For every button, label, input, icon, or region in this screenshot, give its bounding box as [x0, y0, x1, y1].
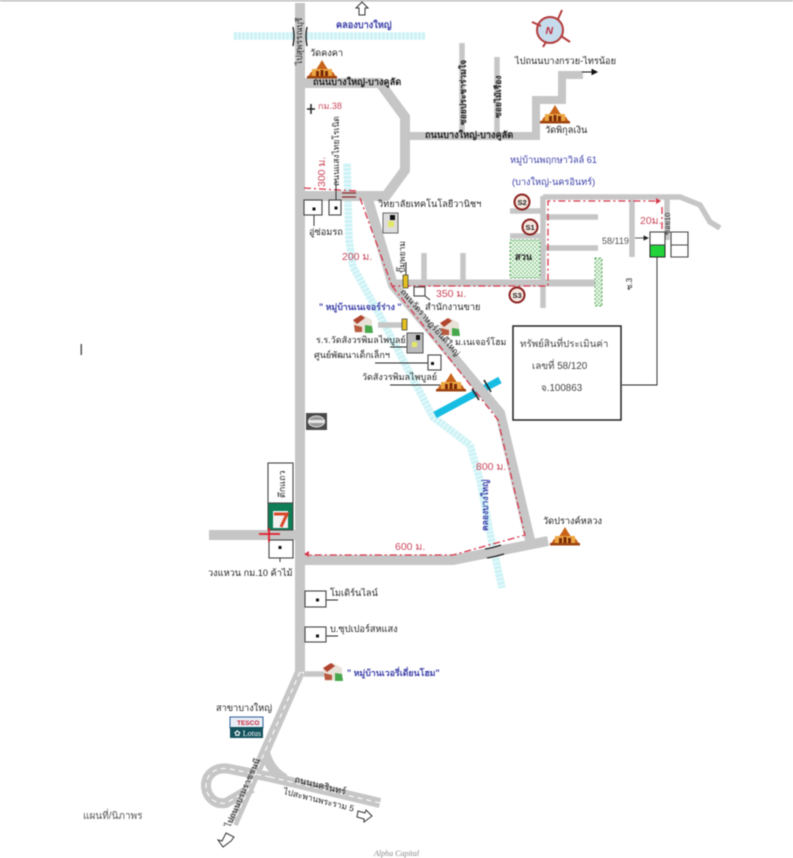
child centre label: ศูนย์พัฒนาเด็กเล็กฯ	[314, 348, 390, 361]
sales office	[414, 287, 425, 296]
khlong label: คลองบางใหญ่	[336, 19, 392, 31]
callout text 1: ทรัพย์สินที่ประเมินค่า	[520, 337, 608, 350]
college flag	[390, 215, 395, 220]
arrow to highway	[218, 833, 234, 847]
nissan emblem	[308, 416, 324, 427]
canal: blue cross channel	[435, 380, 500, 415]
800 m label: 800 ม.	[476, 461, 506, 473]
destination label: ไปถนนบางกรวย-ไทรน้อย	[514, 56, 616, 66]
temple: wat prang luang	[550, 527, 580, 546]
wat label: วัดสังวรพิมลไพบูลย์	[362, 371, 437, 383]
logo bottom	[230, 727, 263, 738]
nissan bar	[308, 420, 325, 423]
buildings	[268, 200, 688, 642]
300 m label: 300 ม.	[316, 157, 328, 187]
north arrow top	[356, 2, 368, 15]
branch at nature village	[378, 322, 403, 328]
watermark: Alpha Capital	[373, 849, 420, 858]
lane markings	[206, 672, 380, 824]
park label: สวน	[515, 252, 533, 262]
house icons	[323, 315, 460, 681]
58/119 label: 58/119	[602, 236, 629, 246]
road to suphan label: ไปสุพรรณบุรี	[294, 17, 305, 66]
park	[510, 240, 540, 278]
plot 58/119	[650, 232, 665, 245]
college plant	[388, 221, 394, 227]
callout box	[513, 326, 621, 420]
compass	[532, 10, 570, 47]
wat prang luang label: วัดปรางค์หลวง	[543, 515, 602, 526]
nature village label: " หมู่บ้านเนเจอร์ร่าง "	[319, 301, 402, 313]
callout text 2: เลขที่ 58/120	[532, 359, 588, 372]
bridge marks at top	[293, 27, 307, 46]
s1 text: S1	[526, 223, 535, 232]
bang yai - bang kulat road	[405, 75, 583, 136]
s3 marker	[510, 288, 524, 302]
350 m label: 350 ม.	[436, 288, 466, 300]
bridge marks at lower road	[485, 545, 504, 558]
canal label: คลองบางใหญ่	[480, 480, 491, 531]
compass N: N	[546, 25, 554, 37]
nature home label: ม.เนเจอร์โฮม	[455, 337, 506, 347]
wat khongkha label: วัดคงคา	[310, 48, 343, 58]
house: nature home	[440, 318, 460, 336]
college label: วิทยาลัยเทคโนโลยีวานิชฯ	[377, 198, 481, 209]
house: nature village	[353, 315, 373, 333]
seven eleven numeral	[274, 514, 287, 527]
village name: หมู่บ้านพฤกษาวิลล์ 61	[510, 154, 597, 166]
tesco lotus logo	[230, 717, 263, 738]
temple: wat phikun ngoen	[540, 105, 570, 124]
garage label: อู่ซ่อมรถ	[309, 227, 343, 238]
red route: 300 m	[304, 188, 357, 191]
leader lines	[280, 180, 657, 636]
soi label 2: ซอยไม้เรือง	[493, 76, 503, 118]
upper loop road	[304, 83, 405, 196]
valuation callout	[513, 326, 621, 420]
rama 5 label: ไปสะพานพระราม 5	[282, 786, 355, 814]
20 m label: 20ม.	[640, 215, 662, 227]
gate marker	[402, 319, 407, 330]
compass spokes	[532, 10, 570, 47]
shophouse label: ตึกแถว	[277, 470, 287, 498]
lower road	[304, 541, 548, 560]
s-markers	[510, 194, 538, 302]
s2 marker	[514, 194, 530, 210]
temple: wat khongkha	[307, 60, 337, 78]
temple: wat sangwon	[436, 373, 466, 392]
super sahasaeng label: บ.ซุปเปอร์สหแสง	[330, 623, 398, 635]
road network	[209, 3, 720, 674]
nissan tile	[306, 413, 327, 430]
compass ring	[537, 17, 563, 43]
s2 text: S2	[518, 198, 527, 207]
lower shop	[269, 540, 293, 558]
canal: khlong bang yai (horizontal)	[233, 32, 425, 40]
small mark at left	[80, 344, 82, 355]
arrow head west	[304, 551, 309, 557]
road label west: ถนนบางใหญ่-บางคูลัด	[313, 76, 401, 88]
red cross marker	[259, 528, 280, 542]
canal: winding waterway	[347, 163, 502, 588]
s1 marker	[522, 220, 538, 234]
school	[407, 333, 423, 353]
km marker	[307, 104, 315, 114]
child centre	[428, 355, 441, 370]
side road label: ถนนแสงไทยโรเนิด	[331, 116, 341, 186]
soi 3 label: ซ.3	[625, 277, 634, 290]
village branch road	[390, 280, 596, 286]
soi label 1: ซอยประชาร่วมใจ	[458, 60, 468, 125]
neighbouring plots	[671, 232, 688, 257]
garage	[304, 200, 322, 215]
wat phikun label: วัดพิกุลเงิน	[545, 125, 588, 136]
subject plot	[650, 245, 665, 257]
side sois	[424, 43, 497, 283]
diagonal road label: ถนนวัดราษฎร์ยินดีใหญ่	[398, 287, 462, 358]
green strip	[595, 258, 602, 306]
red route to plot	[360, 198, 660, 286]
lotus text: ✿ Lotus	[234, 729, 261, 738]
shophouse	[268, 463, 293, 503]
logo top	[230, 717, 263, 728]
bridge marks at diagonal	[472, 380, 491, 400]
spur to village	[304, 671, 327, 677]
bridge at soi	[342, 193, 356, 197]
600 m label: 600 ม.	[395, 541, 425, 553]
modern line label: โมเดิร์นไลน์	[330, 587, 379, 598]
loop	[206, 768, 270, 803]
college	[383, 213, 398, 233]
nakarin road label: ถนนนครินทร์	[294, 773, 347, 797]
tesco text: TESCO	[237, 720, 259, 727]
left branch	[209, 530, 295, 540]
s3 text: S3	[512, 291, 522, 300]
building dots	[278, 206, 434, 638]
km 38 label: กม.38	[318, 101, 342, 111]
arrow head east	[656, 198, 661, 204]
callout text 3: จ.100863	[541, 383, 583, 394]
temple icons	[307, 60, 580, 546]
labels	[83, 17, 672, 858]
diagonal village road	[367, 196, 530, 540]
ring road label: วงแหวน กม.10 ค้าไม้	[208, 568, 293, 578]
highway south	[233, 672, 300, 824]
soi 10 label: ซอย10	[663, 213, 672, 235]
branch label: สาขาบางใหญ่	[216, 703, 272, 713]
arrow to bang kruai	[582, 70, 597, 74]
seven eleven face	[273, 511, 288, 528]
seven eleven	[268, 503, 293, 530]
highway interchange	[206, 672, 380, 824]
arrow to rama 5	[357, 810, 372, 822]
super sahasaeng	[305, 627, 326, 642]
modern line	[305, 591, 326, 607]
connector curve	[265, 752, 285, 779]
house: village south	[323, 663, 343, 681]
nakarin road	[270, 777, 380, 803]
village area: (บางใหญ่-นครอินทร์)	[512, 176, 595, 187]
village grid roads	[510, 196, 720, 308]
pump label: ปั๊มพยาม	[395, 241, 407, 273]
red route south	[308, 286, 525, 555]
credit label: แผนที่/นิภาพร	[83, 808, 143, 822]
main road	[295, 3, 305, 672]
road label east: ถนนบางใหญ่-บางคูลัด	[425, 129, 513, 141]
highway label: ไปถนนบรมราชชนนี	[222, 757, 262, 830]
school flag	[416, 335, 420, 340]
south village label: " หมู่บ้านเวอรี่เดี่ยนโฮม"	[347, 666, 440, 679]
sales office label: สำนักงานขาย	[425, 302, 480, 312]
gas station marker	[403, 275, 408, 288]
building by soi	[329, 200, 341, 215]
200 m label: 200 ม.	[342, 251, 372, 263]
seven eleven tile	[268, 503, 293, 530]
arrow 58/119	[635, 236, 648, 240]
school plant	[412, 342, 417, 347]
top border	[0, 0, 793, 2]
nissan logo	[306, 413, 327, 430]
red route: 20 m	[661, 207, 663, 240]
school label: ร.ร.วัดสังวรพิมลไพบูลย์	[316, 334, 406, 346]
